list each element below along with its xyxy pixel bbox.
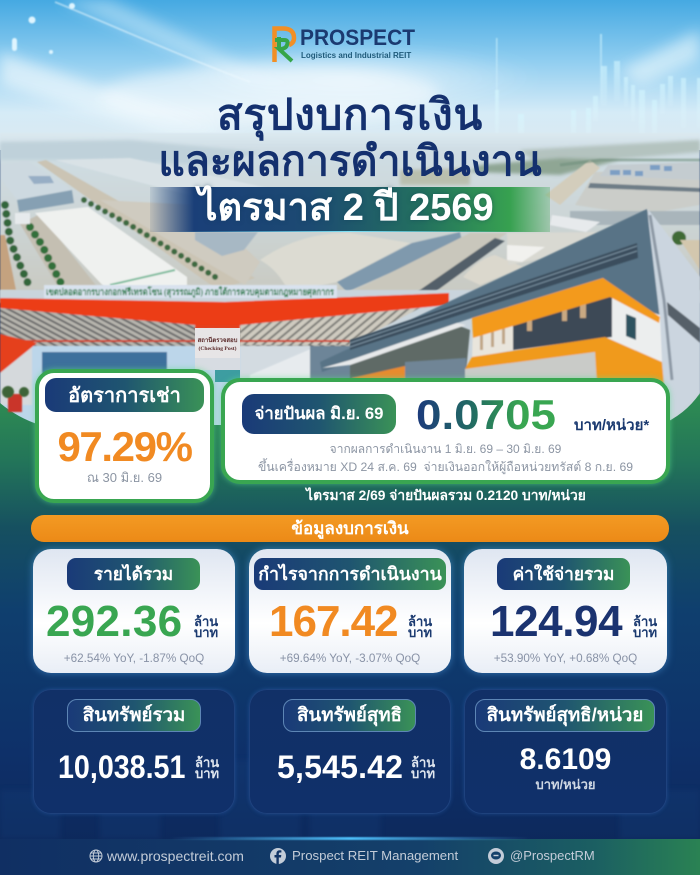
NAV heading — [475, 699, 655, 732]
dividend period: จากผลการดำเนินงาน 1 มิ.ย. 69 – 30 มิ.ย. 69 — [330, 442, 561, 456]
expenses heading: ค่าใช้จ่ายรวม — [513, 564, 614, 584]
panel: net assets — [249, 689, 451, 814]
sign banner — [44, 285, 337, 298]
total assets unit: บาท — [195, 766, 219, 781]
logo — [272, 25, 415, 62]
quarter band: ไตรมาส 2 ปี 2569 — [198, 187, 494, 229]
quarter band — [150, 187, 550, 232]
revenue unit — [194, 614, 218, 640]
icon: line — [488, 848, 504, 864]
total assets unit: ล้าน — [195, 755, 219, 770]
operating profit change: +69.64% YoY, -3.07% QoQ — [280, 652, 420, 665]
checking post sign — [195, 328, 240, 382]
red gate frame — [0, 293, 449, 325]
operating profit unit: ล้าน — [408, 614, 432, 629]
expenses value: 124.94 — [490, 597, 622, 646]
NAV unit: บาท/หน่วย — [535, 777, 596, 792]
building — [320, 209, 700, 420]
panel: dividend — [221, 378, 670, 484]
expenses change: +53.90% YoY, +0.68% QoQ — [494, 652, 637, 665]
panel: total expenses — [464, 549, 667, 673]
dividend heading: จ่ายปันผล มิ.ย. 69 — [255, 404, 383, 423]
panel: NAV per unit — [464, 689, 667, 814]
checking post sign: (Checking Post) — [198, 345, 237, 352]
section heading bar — [31, 515, 669, 542]
sparkles — [12, 3, 75, 54]
sign banner: เขตปลอดอากรบางกอกฟรีเทรดโซน (สุวรรณภูมิ) ภายใต้การควบคุมตามกฎหมายศุลกากร — [46, 286, 335, 298]
dividend heading — [242, 394, 396, 434]
dividend unit: บาท/หน่วย* — [574, 417, 649, 434]
ceiling slats — [0, 308, 350, 346]
total assets heading: สินทรัพย์รวม — [83, 704, 185, 725]
revenue change: +62.54% YoY, -1.87% QoQ — [64, 652, 204, 665]
logo name: PROSPECT — [300, 25, 415, 50]
bottom body with curved photo edge — [0, 393, 700, 875]
aerial industrial park — [0, 133, 700, 303]
revenue heading — [67, 558, 200, 590]
panel: total assets — [33, 689, 235, 814]
total assets value: 10,038.51 — [58, 749, 185, 785]
operating profit value: 167.42 — [269, 597, 398, 646]
title line 1: สรุปงบการเงิน — [217, 91, 483, 138]
net assets unit: ล้าน — [411, 755, 435, 770]
occupancy heading — [45, 378, 204, 412]
operating profit unit — [408, 614, 432, 640]
occupancy value: 97.29% — [57, 423, 192, 470]
footer bar — [0, 839, 700, 875]
net assets heading: สินทรัพย์สุทธิ — [297, 704, 402, 725]
checking post sign: สถานีตรวจสอบ — [198, 336, 238, 344]
operating profit heading: กำไรจากการดำเนินงาน — [258, 564, 442, 584]
faint city — [0, 760, 700, 839]
panel: occupancy — [35, 369, 214, 503]
panel: revenue — [33, 549, 235, 673]
footer contacts — [90, 848, 595, 864]
dividend dates: ขึ้นเครื่องหมาย XD 24 ส.ค. 69 จ่ายเงินออกให้ผู้ถือหน่วยทรัสต์ 8 ก.ย. 69 — [258, 460, 633, 474]
expenses unit: บาท — [633, 625, 657, 640]
revenue heading: รายได้รวม — [94, 564, 173, 584]
NAV heading: สินทรัพย์สุทธิ/หน่วย — [487, 704, 643, 725]
net assets unit — [411, 755, 436, 781]
revenue value: 292.36 — [46, 597, 182, 646]
expenses unit: ล้าน — [633, 614, 657, 629]
NAV value: 8.6109 — [520, 743, 611, 776]
line handle: @ProspectRM — [510, 848, 595, 863]
icon: facebook — [270, 848, 286, 864]
net assets value: 5,545.42 — [277, 749, 403, 785]
occupancy heading: อัตราการเช่า — [68, 385, 181, 407]
total assets unit — [195, 755, 220, 781]
photo lower: gate and warehouse — [0, 290, 700, 430]
net assets heading — [283, 699, 416, 732]
facebook name: Prospect REIT Management — [292, 848, 458, 863]
operating profit heading — [254, 558, 446, 590]
icon: globe — [90, 850, 102, 862]
dividend value: 0.0705 — [416, 391, 556, 438]
logo tagline: Logistics and Industrial REIT — [301, 51, 411, 60]
dividend total note: ไตรมาส 2/69 จ่ายปันผลรวม 0.2120 บาท/หน่วย — [306, 488, 586, 503]
total assets heading — [67, 699, 201, 732]
planters — [2, 386, 29, 412]
net assets unit: บาท — [411, 766, 435, 781]
occupancy date: ณ 30 มิ.ย. 69 — [87, 470, 162, 485]
revenue unit: บาท — [194, 625, 218, 640]
website: www.prospectreit.com — [107, 848, 244, 864]
panel: operating profit — [249, 549, 451, 673]
operating profit unit: บาท — [408, 625, 432, 640]
finance bars — [495, 34, 700, 144]
title line 2: และผลการดำเนินงาน — [158, 138, 542, 184]
expenses heading — [497, 558, 630, 590]
section heading bar: ข้อมูลงบการเงิน — [291, 519, 409, 538]
logo mark — [272, 26, 296, 62]
expenses unit — [633, 614, 658, 640]
revenue unit: ล้าน — [194, 614, 218, 629]
